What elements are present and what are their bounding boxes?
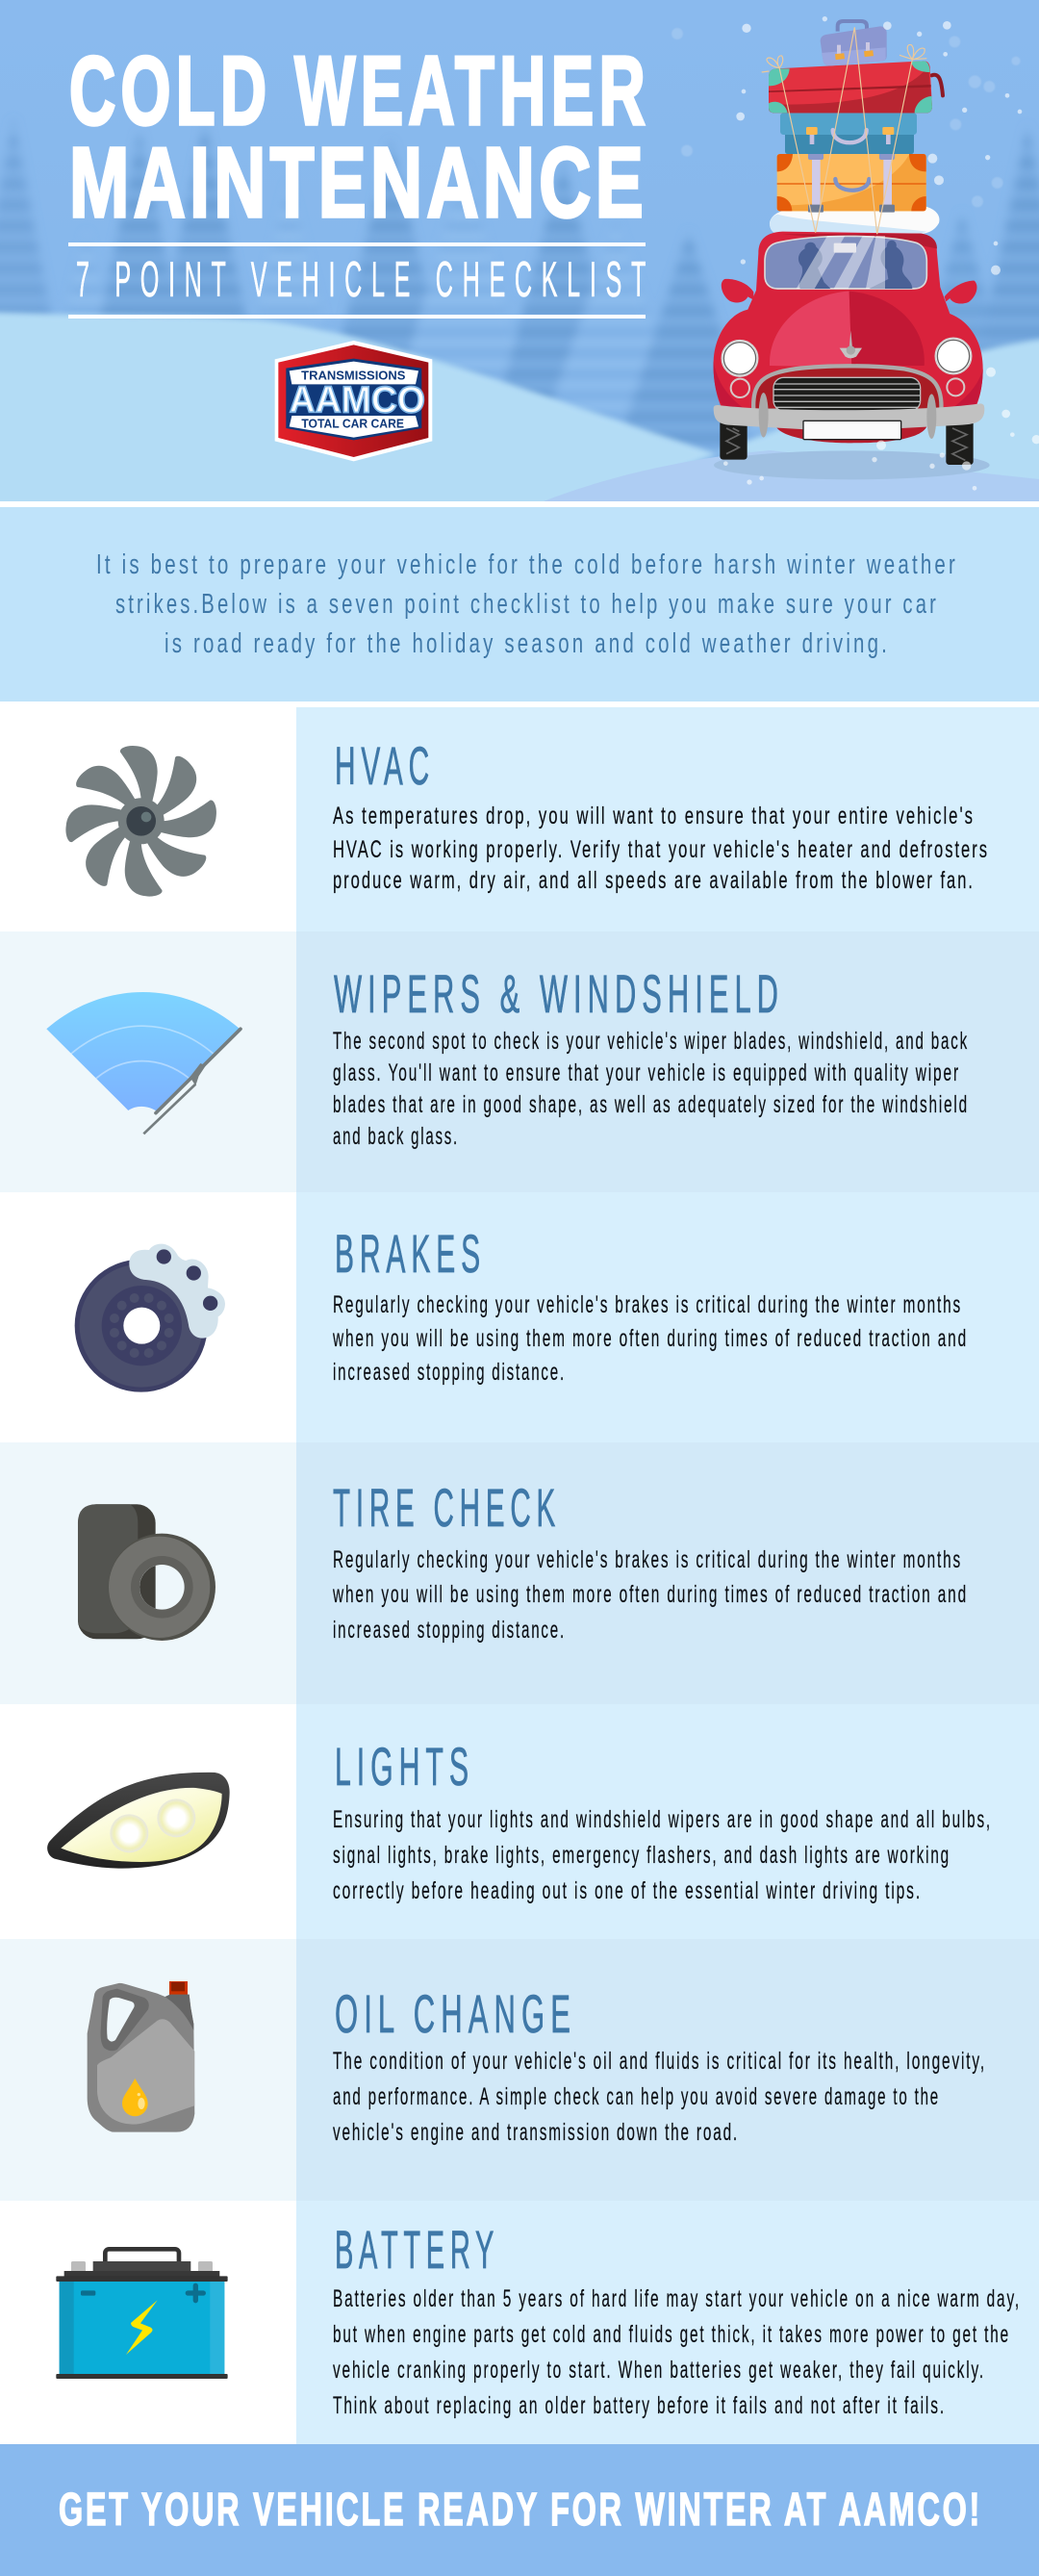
windscreen xyxy=(765,236,926,289)
logo: AAMCO: TRANSMISSIONS xyxy=(301,369,406,383)
heading: HVAC xyxy=(335,735,435,796)
icon: oil jug xyxy=(88,1981,194,2132)
luggage: blue case xyxy=(780,113,917,154)
heading: LIGHTS xyxy=(335,1736,474,1797)
heading: OIL CHANGE xyxy=(335,1983,576,2044)
car body xyxy=(714,232,984,443)
ground shadow xyxy=(714,450,990,479)
intro panel xyxy=(0,507,1039,701)
icon: headlight xyxy=(47,1773,230,1869)
logo: AAMCO: TOTAL CAR CARE xyxy=(301,416,404,430)
panel: wipers and windshield xyxy=(0,931,1039,1192)
panel: lights xyxy=(47,1704,1039,1939)
logo: AAMCO: AAMCO xyxy=(290,379,425,421)
body text xyxy=(333,803,989,894)
body text xyxy=(333,1806,992,1904)
body text xyxy=(332,1291,968,1386)
icon: battery xyxy=(56,2249,228,2379)
number plate xyxy=(803,421,901,440)
icon: wiper xyxy=(46,992,241,1134)
subtitle with rules xyxy=(68,242,655,319)
hood ornament xyxy=(840,330,862,358)
header banner xyxy=(0,0,1039,520)
body text: increased stopping distance. xyxy=(333,1359,566,1386)
icon: brake disc xyxy=(75,1244,225,1392)
tires xyxy=(720,421,974,465)
winter background scene xyxy=(0,0,1039,520)
footer banner xyxy=(0,2444,1039,2576)
body text xyxy=(333,2285,1021,2419)
icon: fan xyxy=(65,746,216,897)
luggage: orange case xyxy=(770,152,939,234)
ropes xyxy=(762,27,926,234)
lower red xyxy=(776,426,926,443)
luggage: red case xyxy=(769,61,943,113)
heading: BRAKES xyxy=(335,1223,486,1284)
bumper xyxy=(714,393,984,439)
grille and surround xyxy=(753,366,941,411)
body text: and back glass. xyxy=(333,1123,459,1150)
headlights xyxy=(722,338,972,397)
body text xyxy=(333,1028,969,1150)
body text xyxy=(332,1546,968,1644)
logo: AAMCO xyxy=(275,341,432,461)
heading: BATTERY xyxy=(335,2219,499,2280)
body text xyxy=(333,2048,986,2146)
luggage: purple briefcase xyxy=(821,21,887,65)
illustration: red car with luggage xyxy=(672,16,1039,491)
heading: TIRE CHECK xyxy=(333,1477,561,1538)
body text: increased stopping distance. xyxy=(333,1617,566,1644)
falling snow xyxy=(723,16,1039,491)
title xyxy=(69,38,650,238)
panel: HVAC xyxy=(65,707,1039,931)
blurred snow xyxy=(672,28,1021,207)
icon: tire xyxy=(78,1504,215,1641)
panel: battery xyxy=(56,2201,1039,2444)
panel: tire check xyxy=(0,1442,1039,1704)
car mirrors xyxy=(722,279,976,304)
panel: oil change xyxy=(0,1939,1039,2201)
panel: brakes xyxy=(75,1192,1039,1442)
body text: vehicle's engine and transmission down the road. xyxy=(333,2119,739,2146)
title: COLD WEATHER xyxy=(69,38,650,145)
title: MAINTENANCE xyxy=(69,127,647,238)
